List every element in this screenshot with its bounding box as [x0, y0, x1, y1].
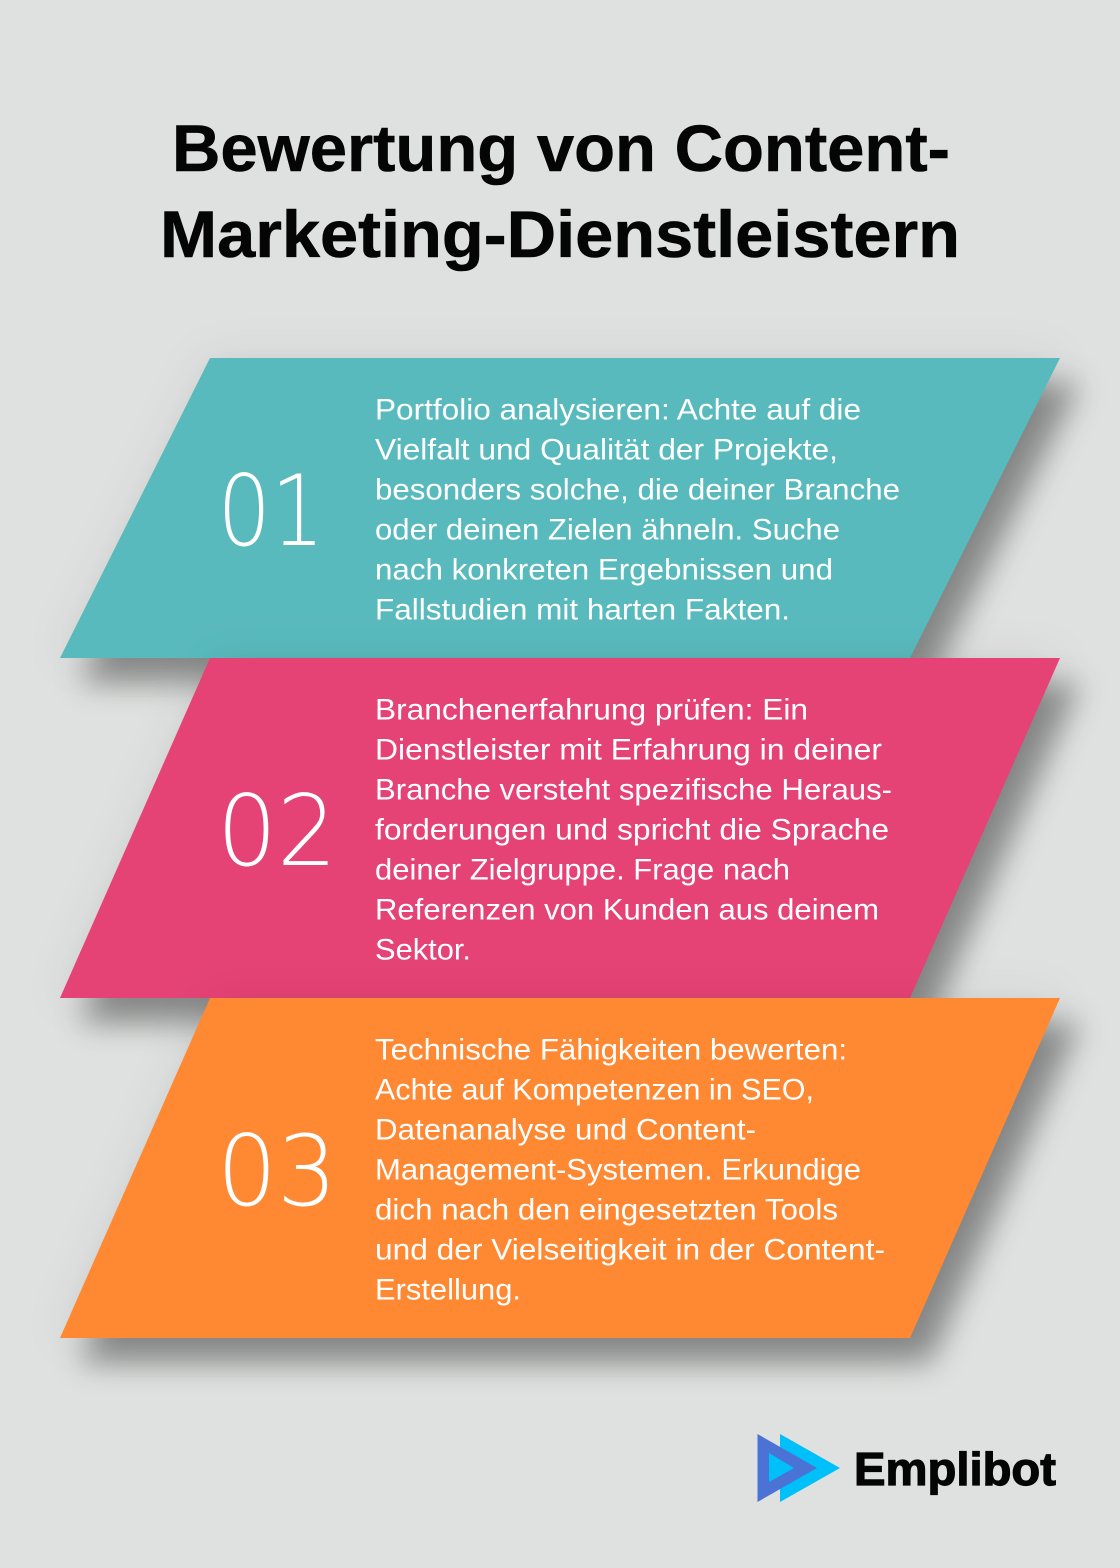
step 03 text: Erstellung.: [375, 1274, 521, 1306]
wordmark: Emplibot: [854, 1443, 1056, 1495]
number 02: 02: [217, 775, 337, 889]
step 02 text: deiner Zielgruppe. Frage nach: [375, 854, 790, 886]
step 03 text: Achte auf Kompetenzen in SEO,: [375, 1074, 814, 1106]
panel: step 02: [60, 658, 1060, 998]
number 03: 03: [217, 1115, 337, 1229]
teal parallelogram: [60, 358, 1060, 658]
pink parallelogram: [60, 658, 1060, 998]
step 03 text: Technische Fähigkeiten bewerten:: [375, 1034, 847, 1066]
step 01 text: oder deinen Zielen ähneln. Suche: [375, 514, 840, 546]
title: Marketing-Dienstleistern: [160, 197, 960, 271]
step 02 text: Branche versteht spezifische Heraus-: [375, 774, 892, 806]
step 02 text: [375, 694, 892, 966]
step 02 text: Referenzen von Kunden aus deinem: [375, 894, 879, 926]
step 02 text: forderungen und spricht die Sprache: [375, 814, 889, 846]
step 02 text: Dienstleister mit Erfahrung in deiner: [375, 734, 882, 766]
step 03 text: [375, 1034, 885, 1306]
step 01 text: Fallstudien mit harten Fakten.: [375, 594, 790, 626]
orange parallelogram: [60, 998, 1060, 1338]
number 01: 01: [218, 455, 324, 569]
step 01 text: Vielfalt und Qualität der Projekte,: [375, 434, 838, 466]
step 03 text: Management-Systemen. Erkundige: [375, 1154, 861, 1186]
title: Bewertung von Content-: [172, 111, 950, 185]
step 01 text: nach konkreten Ergebnissen und: [375, 554, 833, 586]
icon: play triangles: [758, 1434, 840, 1502]
step 03 text: und der Vielseitigkeit in der Content-: [375, 1234, 885, 1266]
step 01 text: besonders solche, die deiner Branche: [375, 474, 900, 506]
logo: Emplibot: [758, 1434, 1056, 1502]
panel: step 03: [60, 998, 1060, 1338]
step 03 text: dich nach den eingesetzten Tools: [375, 1194, 838, 1226]
step 03 text: Datenanalyse und Content-: [375, 1114, 756, 1146]
step 02 text: Branchenerfahrung prüfen: Ein: [375, 694, 808, 726]
title: [160, 111, 960, 271]
panel: step 01: [60, 358, 1060, 658]
step 01 text: [375, 394, 900, 626]
step 01 text: Portfolio analysieren: Achte auf die: [375, 394, 861, 426]
step 02 text: Sektor.: [375, 934, 471, 966]
